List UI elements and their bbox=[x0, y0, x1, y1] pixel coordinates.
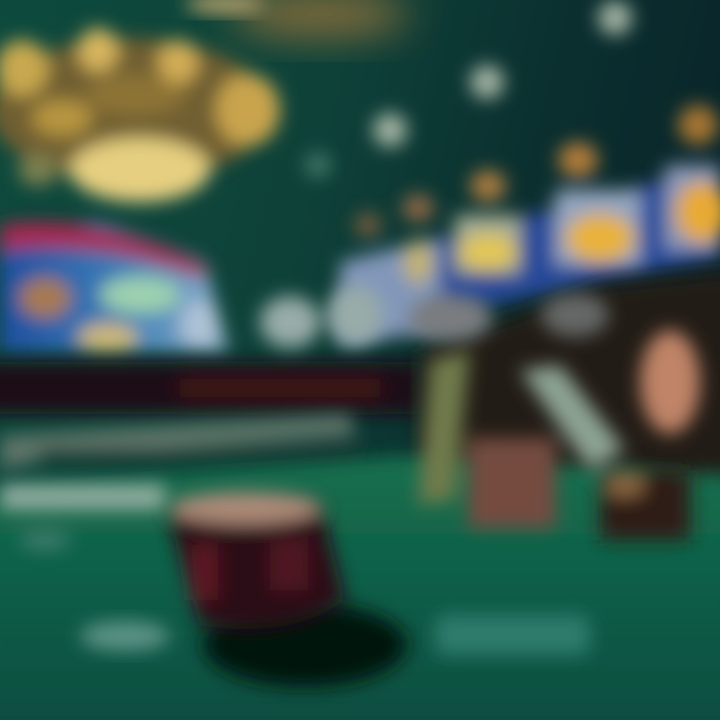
grey counter bbox=[0, 414, 370, 470]
ceiling fixture highlight bbox=[185, 0, 265, 13]
right dark wall bbox=[420, 270, 720, 490]
blurred caption right bbox=[435, 615, 590, 655]
chip stack bbox=[168, 492, 345, 629]
chandelier bbox=[0, 28, 280, 202]
right banner bbox=[340, 105, 720, 345]
green table bbox=[0, 456, 720, 720]
text on table left bbox=[0, 484, 165, 550]
dark red band bbox=[0, 362, 420, 414]
figures bbox=[418, 330, 700, 540]
grey blurred word bbox=[260, 285, 609, 348]
ceiling gold fixture bbox=[230, 0, 410, 38]
blurred caption left bbox=[80, 621, 170, 651]
left screen bbox=[0, 222, 228, 353]
chip shadow bbox=[203, 603, 407, 687]
ceiling lights bbox=[305, 1, 632, 178]
